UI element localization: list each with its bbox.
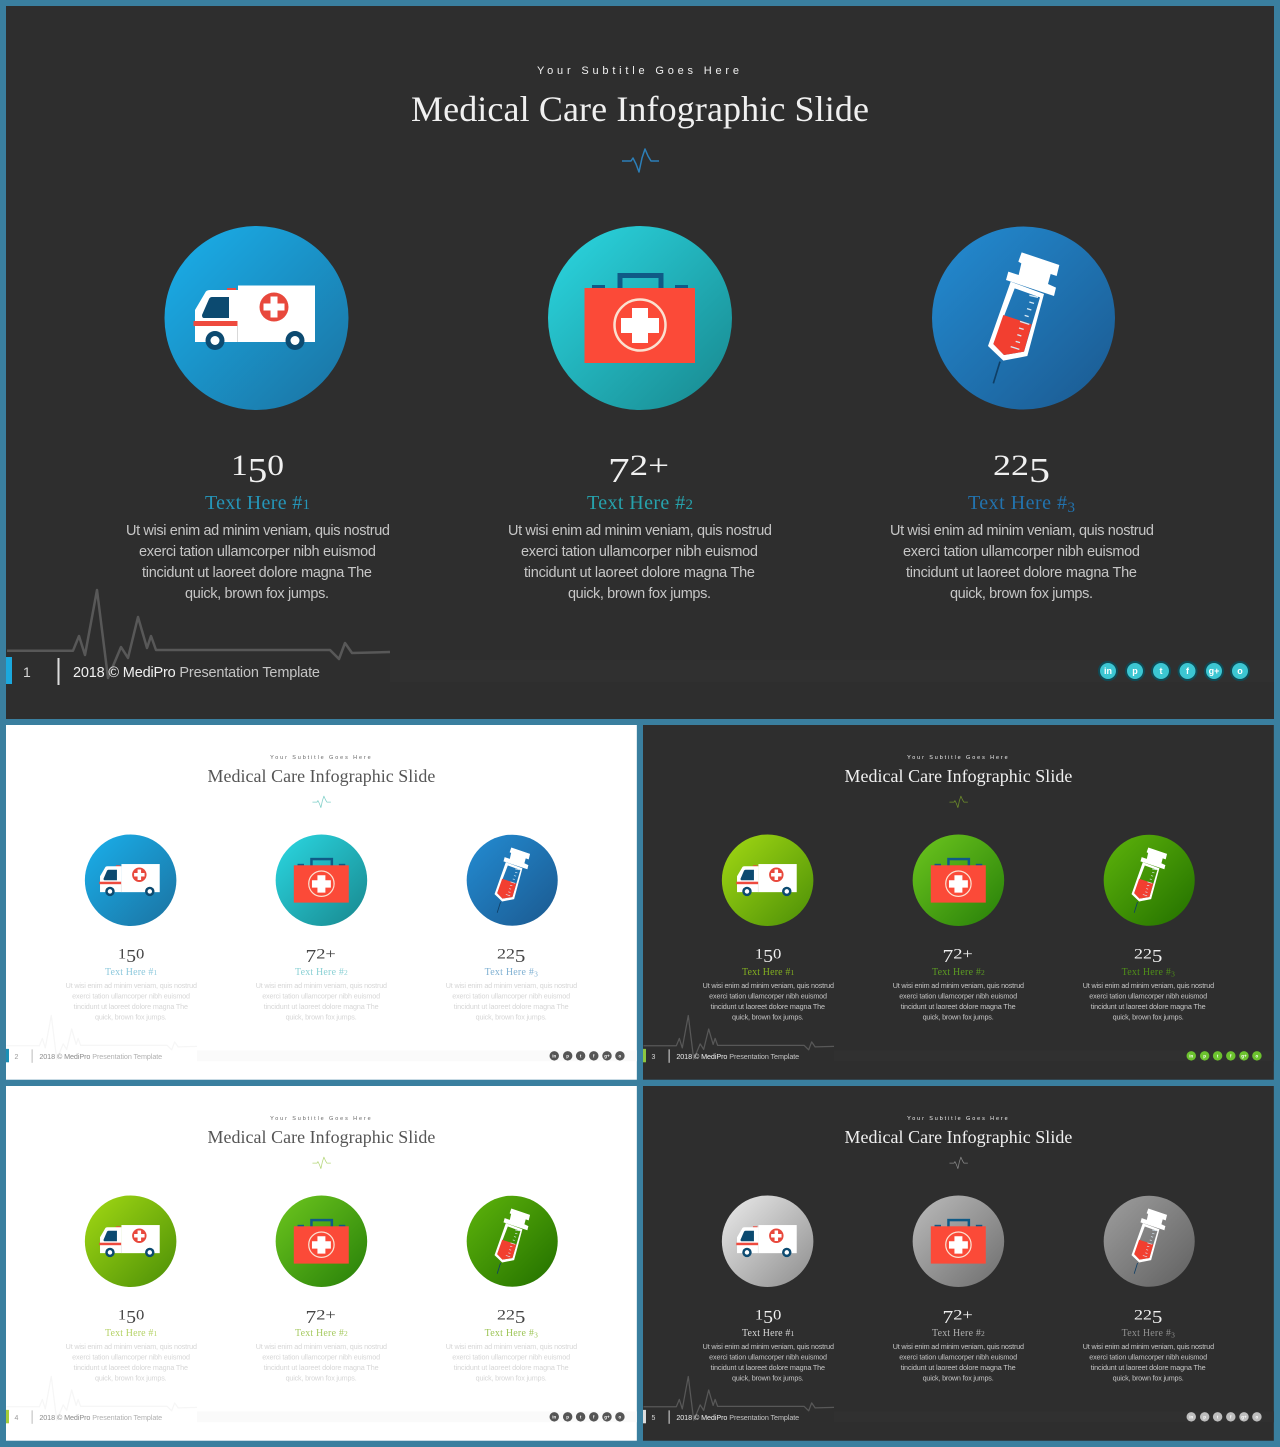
column 2 stat: tincidunt ut laoreet dolore magna The: [524, 565, 755, 581]
icon: ambulance: [164, 226, 348, 410]
column 3 stat: [1083, 946, 1214, 1022]
column 2 stat: quick, brown fox jumps.: [568, 586, 711, 602]
column 3 stat: tincidunt ut laoreet dolore magna The: [1091, 1363, 1206, 1372]
column 1 stat: quick, brown fox jumps.: [732, 1374, 804, 1383]
social icons: f: [593, 1414, 595, 1419]
column 1 stat: [703, 1307, 834, 1383]
column 3 stat: exerci tation ullamcorper nibh euismod: [1089, 1353, 1207, 1362]
column 3 stat: [890, 449, 1154, 602]
column 3 stat: tincidunt ut laoreet dolore magna The: [454, 1363, 569, 1372]
column 2 stat: tincidunt ut laoreet dolore magna The: [264, 1363, 379, 1372]
column 3 stat: 3: [534, 1331, 538, 1340]
column 2 stat: [893, 946, 1024, 1022]
heartbeat line: [6, 1377, 197, 1420]
subtitle: Your Subtitle Goes Here: [907, 755, 1008, 761]
column 1 stat: exerci tation ullamcorper nibh euismod: [709, 1353, 827, 1362]
column 2 stat: 2+: [953, 946, 973, 962]
column 3 stat: quick, brown fox jumps.: [476, 1013, 547, 1022]
column 3 stat: Text Here #: [1122, 967, 1171, 978]
footer band: [197, 1411, 637, 1422]
column 2 stat: Text Here #2: [932, 967, 985, 978]
column 3 stat: Ut wisi enim ad minim veniam, quis nostrud: [1083, 981, 1214, 990]
icon: syringe: [467, 835, 558, 926]
column 1 stat: 5: [248, 451, 267, 490]
column 3 stat: 3: [534, 970, 538, 979]
column 3 stat: 22: [497, 946, 512, 962]
column 2 stat: exerci tation ullamcorper nibh euismod: [262, 1353, 380, 1362]
footer page marker: [6, 657, 60, 685]
column 3 stat: exerci tation ullamcorper nibh euismod: [452, 992, 570, 1001]
social icons: t: [1217, 1414, 1219, 1419]
column 3 stat: 22: [497, 1307, 512, 1323]
title: Medical Care Infographic Slide: [411, 89, 869, 129]
column 2 stat: 7: [608, 451, 630, 490]
column 3 stat: 3: [1068, 500, 1075, 516]
column 1 stat: Ut wisi enim ad minim veniam, quis nostrud: [126, 523, 390, 539]
column 1 stat: 0: [136, 1307, 144, 1323]
column 3 stat: [446, 1307, 577, 1383]
column 1 stat: 0: [773, 946, 781, 962]
social icons: in: [552, 1414, 556, 1419]
footer text: 2018 © MediPro Presentation Template: [73, 665, 320, 681]
column 1 stat: Text Here #1: [742, 1328, 795, 1339]
column 1 stat: 0: [267, 449, 284, 482]
column 2 stat: [256, 946, 387, 1022]
title: Medical Care Infographic Slide: [207, 766, 435, 786]
social icons: o: [619, 1053, 622, 1058]
column 2 stat: Ut wisi enim ad minim veniam, quis nostrud: [893, 1342, 1024, 1351]
column 2 stat: tincidunt ut laoreet dolore magna The: [901, 1002, 1016, 1011]
footer page marker: 5: [651, 1415, 655, 1422]
footer text: 2018 © MediPro Presentation Template: [676, 1052, 799, 1061]
social icons: t: [580, 1414, 582, 1419]
column 2 stat: Ut wisi enim ad minim veniam, quis nostrud: [893, 981, 1024, 990]
icon: syringe: [932, 226, 1115, 410]
social icons: in: [1104, 666, 1112, 676]
icon: syringe: [1104, 1196, 1195, 1287]
icon: pulse line: [622, 149, 659, 172]
column 2 stat: 2+: [316, 946, 336, 962]
social icons: p: [1203, 1414, 1206, 1419]
icon: medical kit: [276, 834, 367, 926]
column 3 stat: [1083, 1307, 1214, 1383]
panel: small dark grey slide: [643, 1086, 1274, 1441]
footer page marker: [643, 1049, 670, 1063]
social icons: o: [619, 1414, 622, 1419]
footer page marker: [643, 1410, 670, 1424]
footer text: 2018 © MediPro Presentation Template: [39, 1052, 162, 1061]
footer page marker: 1: [23, 664, 31, 680]
column 2 stat: Text Here #2: [587, 492, 693, 514]
column 1 stat: 1: [755, 1307, 762, 1323]
title: Medical Care Infographic Slide: [844, 766, 1072, 786]
social icons: t: [1160, 666, 1162, 676]
column 2 stat: quick, brown fox jumps.: [923, 1013, 994, 1022]
column 3 stat: [446, 946, 577, 1022]
icon: ambulance: [722, 834, 813, 926]
column 1 stat: quick, brown fox jumps.: [185, 586, 329, 602]
column 3 stat: tincidunt ut laoreet dolore magna The: [454, 1002, 569, 1011]
column 1 stat: tincidunt ut laoreet dolore magna The: [711, 1363, 825, 1372]
subtitle: Your Subtitle Goes Here: [537, 65, 739, 77]
column 1 stat: tincidunt ut laoreet dolore magna The: [142, 565, 372, 581]
social icons: p: [1203, 1053, 1206, 1058]
column 3 stat: tincidunt ut laoreet dolore magna The: [906, 565, 1137, 581]
column 1 stat: Ut wisi enim ad minim veniam, quis nostrud: [703, 981, 834, 990]
column 3 stat: 5: [1152, 1307, 1163, 1327]
column 1 stat: Text Here #1: [105, 1328, 158, 1339]
footer page marker: 2: [14, 1054, 18, 1061]
column 2 stat: Text Here #2: [295, 967, 348, 978]
column 1 stat: 5: [126, 946, 136, 966]
column 2 stat: quick, brown fox jumps.: [286, 1013, 357, 1022]
column 1 stat: 5: [763, 946, 773, 966]
social icons: f: [1230, 1053, 1232, 1058]
subtitle: Your Subtitle Goes Here: [270, 755, 371, 761]
column 1 stat: tincidunt ut laoreet dolore magna The: [711, 1002, 825, 1011]
footer text: 2018 © MediPro Presentation Template: [39, 1413, 162, 1422]
column 1 stat: tincidunt ut laoreet dolore magna The: [74, 1363, 188, 1372]
icon: pulse line: [949, 1157, 968, 1169]
column 2 stat: Text Here #2: [295, 1328, 348, 1339]
column 1 stat: [66, 1307, 197, 1383]
social icons: o: [1256, 1414, 1259, 1419]
column 1 stat: 1: [231, 449, 246, 482]
column 3 stat: Text Here #: [485, 967, 534, 978]
column 3 stat: Text Here #: [485, 1328, 534, 1339]
column 1 stat: exerci tation ullamcorper nibh euismod: [709, 992, 827, 1001]
heartbeat line: [6, 1016, 197, 1059]
column 3 stat: 5: [1029, 451, 1050, 490]
panel: small dark green slide: [643, 725, 1274, 1080]
icon: medical kit: [548, 226, 732, 410]
column 3 stat: Ut wisi enim ad minim veniam, quis nostrud: [446, 1342, 577, 1351]
social icons: f: [593, 1053, 595, 1058]
icon: medical kit: [276, 1195, 367, 1287]
social icons: g+: [1209, 666, 1219, 676]
icon: ambulance: [85, 1195, 176, 1287]
column 2 stat: quick, brown fox jumps.: [286, 1374, 357, 1383]
column 3 stat: quick, brown fox jumps.: [476, 1374, 547, 1383]
footer page marker: [6, 1410, 33, 1424]
column 2 stat: Text Here #2: [932, 1328, 985, 1339]
column 2 stat: 2+: [953, 1307, 973, 1323]
column 2 stat: [508, 449, 772, 602]
column 3 stat: exerci tation ullamcorper nibh euismod: [452, 1353, 570, 1362]
social icons: [550, 1412, 625, 1422]
column 2 stat: [893, 1307, 1024, 1383]
social icons: t: [1217, 1053, 1219, 1058]
column 1 stat: 0: [773, 1307, 781, 1323]
column 1 stat: Text Here #1: [105, 967, 158, 978]
social icons: p: [566, 1053, 569, 1058]
icon: pulse line: [312, 796, 331, 808]
column 2 stat: tincidunt ut laoreet dolore magna The: [264, 1002, 379, 1011]
social icons: f: [1186, 666, 1190, 676]
column 1 stat: 5: [763, 1307, 773, 1327]
column 3 stat: 5: [1152, 946, 1163, 966]
footer band: [834, 1050, 1274, 1061]
column 3 stat: 3: [1171, 1331, 1175, 1340]
column 2 stat: 7: [942, 1307, 954, 1327]
social icons: [1099, 662, 1249, 680]
column 2 stat: [256, 1307, 387, 1383]
icon: syringe: [1104, 835, 1195, 926]
social icons: [1187, 1051, 1262, 1061]
column 2 stat: 2+: [316, 1307, 336, 1323]
column 2 stat: exerci tation ullamcorper nibh euismod: [899, 992, 1017, 1001]
column 1 stat: Text Here #1: [742, 967, 795, 978]
social icons: [550, 1051, 625, 1061]
column 1 stat: [703, 946, 834, 1022]
column 1 stat: [126, 449, 390, 602]
footer page marker: 3: [651, 1054, 655, 1061]
column 1 stat: [66, 946, 197, 1022]
icon: ambulance: [722, 1195, 813, 1287]
column 3 stat: Text Here #: [968, 492, 1067, 514]
column 1 stat: exerci tation ullamcorper nibh euismod: [72, 1353, 190, 1362]
column 3 stat: exerci tation ullamcorper nibh euismod: [903, 544, 1140, 560]
social icons: g+: [1241, 1414, 1247, 1419]
column 3 stat: 22: [1134, 1307, 1149, 1323]
column 1 stat: Ut wisi enim ad minim veniam, quis nostrud: [66, 981, 197, 990]
column 2 stat: tincidunt ut laoreet dolore magna The: [901, 1363, 1016, 1372]
column 3 stat: 5: [515, 946, 526, 966]
icon: ambulance: [85, 834, 176, 926]
column 1 stat: exerci tation ullamcorper nibh euismod: [72, 992, 190, 1001]
footer page marker: 4: [14, 1415, 18, 1422]
social icons: [1187, 1412, 1262, 1422]
column 1 stat: 1: [118, 946, 125, 962]
social icons: p: [566, 1414, 569, 1419]
column 1 stat: Text Here #1: [205, 492, 310, 514]
column 1 stat: 1: [118, 1307, 125, 1323]
social icons: in: [1189, 1414, 1193, 1419]
column 1 stat: 5: [126, 1307, 136, 1327]
heartbeat line: [643, 1377, 834, 1420]
column 2 stat: Ut wisi enim ad minim veniam, quis nostrud: [508, 523, 772, 539]
column 3 stat: 22: [993, 449, 1023, 482]
social icons: o: [1256, 1053, 1259, 1058]
column 2 stat: 7: [305, 1307, 317, 1327]
column 1 stat: quick, brown fox jumps.: [95, 1374, 167, 1383]
column 1 stat: 1: [755, 946, 762, 962]
icon: medical kit: [913, 1195, 1004, 1287]
social icons: p: [1132, 666, 1138, 676]
column 3 stat: quick, brown fox jumps.: [1113, 1013, 1184, 1022]
social icons: f: [1230, 1414, 1232, 1419]
social icons: in: [552, 1053, 556, 1058]
heartbeat line: [643, 1016, 834, 1059]
column 2 stat: exerci tation ullamcorper nibh euismod: [521, 544, 758, 560]
column 1 stat: quick, brown fox jumps.: [95, 1013, 167, 1022]
column 2 stat: 7: [305, 946, 317, 966]
column 3 stat: tincidunt ut laoreet dolore magna The: [1091, 1002, 1206, 1011]
column 3 stat: quick, brown fox jumps.: [1113, 1374, 1184, 1383]
social icons: g+: [604, 1053, 610, 1058]
column 1 stat: exerci tation ullamcorper nibh euismod: [139, 544, 376, 560]
column 3 stat: 5: [515, 1307, 526, 1327]
social icons: in: [1189, 1053, 1193, 1058]
column 3 stat: 22: [1134, 946, 1149, 962]
social icons: t: [580, 1053, 582, 1058]
icon: syringe: [467, 1196, 558, 1287]
icon: pulse line: [949, 796, 968, 808]
icon: medical kit: [913, 834, 1004, 926]
heartbeat line: [7, 590, 390, 678]
column 2 stat: exerci tation ullamcorper nibh euismod: [262, 992, 380, 1001]
icon: pulse line: [312, 1157, 331, 1169]
column 3 stat: 3: [1171, 970, 1175, 979]
column 2 stat: quick, brown fox jumps.: [923, 1374, 994, 1383]
panel: small white green slide: [6, 1086, 637, 1441]
social icons: g+: [604, 1414, 610, 1419]
column 2 stat: exerci tation ullamcorper nibh euismod: [899, 1353, 1017, 1362]
footer text: 2018 © MediPro Presentation Template: [676, 1413, 799, 1422]
column 1 stat: Ut wisi enim ad minim veniam, quis nostrud: [66, 1342, 197, 1351]
column 3 stat: Ut wisi enim ad minim veniam, quis nostrud: [1083, 1342, 1214, 1351]
column 3 stat: Text Here #: [1122, 1328, 1171, 1339]
column 1 stat: 0: [136, 946, 144, 962]
column 2 stat: 7: [942, 946, 954, 966]
column 3 stat: exerci tation ullamcorper nibh euismod: [1089, 992, 1207, 1001]
column 2 stat: Ut wisi enim ad minim veniam, quis nostrud: [256, 1342, 387, 1351]
title: Medical Care Infographic Slide: [844, 1127, 1072, 1147]
column 3 stat: Ut wisi enim ad minim veniam, quis nostrud: [890, 523, 1154, 539]
subtitle: Your Subtitle Goes Here: [270, 1116, 371, 1122]
panel: small white blue slide: [6, 725, 637, 1080]
panel: large dark blue slide: [6, 6, 1274, 719]
social icons: g+: [1241, 1053, 1247, 1058]
title: Medical Care Infographic Slide: [207, 1127, 435, 1147]
column 2 stat: 2+: [630, 449, 669, 482]
footer band: [834, 1411, 1274, 1422]
footer band: [197, 1050, 637, 1061]
footer page marker: [6, 1049, 33, 1063]
social icons: o: [1237, 666, 1243, 676]
column 1 stat: quick, brown fox jumps.: [732, 1013, 804, 1022]
footer band: [390, 660, 1274, 682]
column 3 stat: Ut wisi enim ad minim veniam, quis nostrud: [446, 981, 577, 990]
column 2 stat: Ut wisi enim ad minim veniam, quis nostrud: [256, 981, 387, 990]
subtitle: Your Subtitle Goes Here: [907, 1116, 1008, 1122]
column 1 stat: Ut wisi enim ad minim veniam, quis nostrud: [703, 1342, 834, 1351]
column 1 stat: tincidunt ut laoreet dolore magna The: [74, 1002, 188, 1011]
column 3 stat: quick, brown fox jumps.: [950, 586, 1093, 602]
